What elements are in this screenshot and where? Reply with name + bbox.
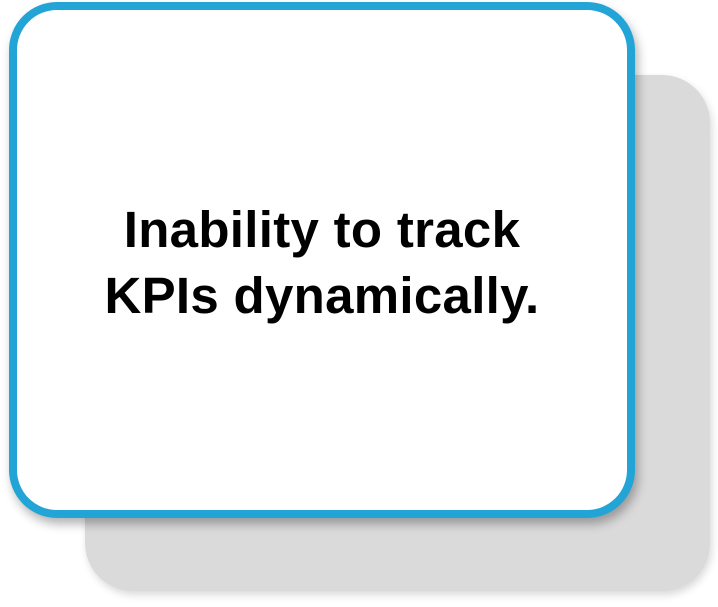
front card [9, 2, 635, 518]
text: main statement [104, 201, 540, 324]
text: main statement: Inability to track [124, 201, 520, 258]
text: main statement: KPIs dynamically. [104, 267, 540, 324]
back card shadow panel [85, 75, 710, 591]
